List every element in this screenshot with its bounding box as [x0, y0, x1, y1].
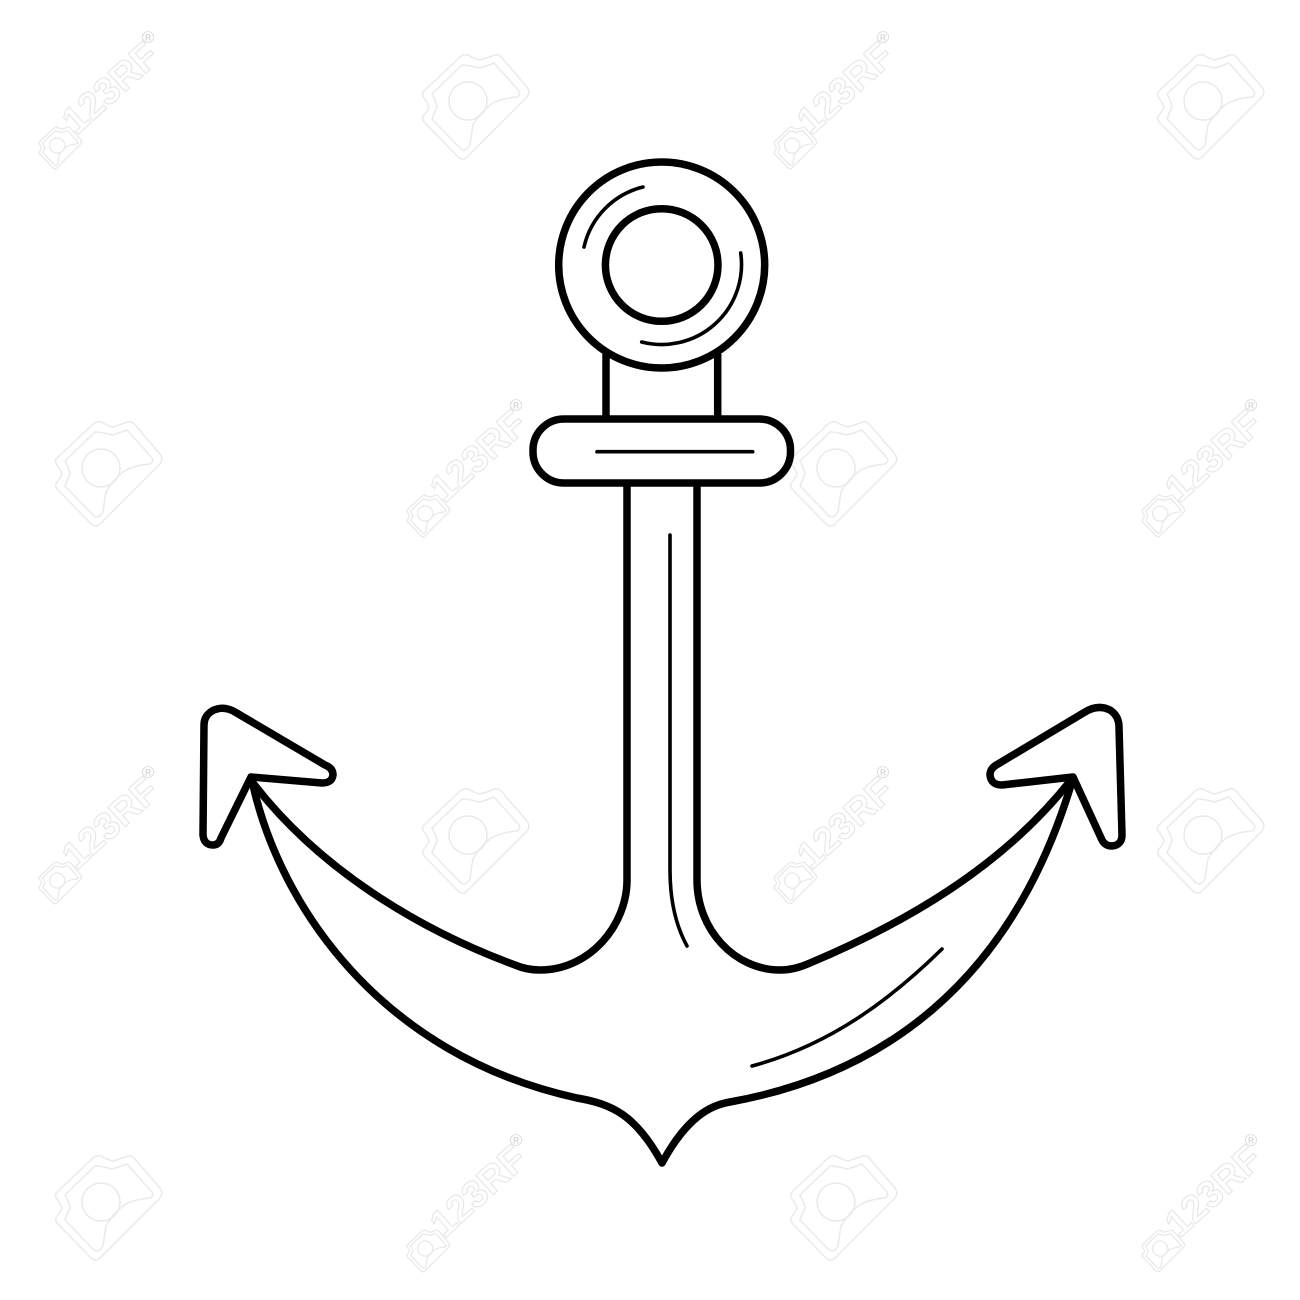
watermark stamp 8: 123RF: [1157, 1138, 1270, 1246]
watermark stamp 4: 123RF: [789, 770, 902, 878]
watermark stamp 7: ®: [510, 1131, 523, 1150]
shank highlight: [670, 535, 687, 946]
shank and flukes outline: [253, 487, 627, 970]
watermark icon 6: [790, 422, 897, 526]
watermark stamp 1: [39, 28, 167, 169]
fluke highlight: [752, 949, 942, 1066]
right barb: [990, 707, 1122, 846]
watermark stamp 5: ®: [510, 396, 523, 415]
watermark stamp 2: ®: [877, 28, 890, 47]
neck between ring and stock: [606, 354, 718, 418]
watermark icon 8: [790, 1156, 897, 1260]
watermark stamp 5: [407, 396, 535, 537]
watermark icon 5: [56, 422, 162, 526]
watermark stamp 1: 123RF: [54, 35, 167, 143]
watermark stamp 4: ®: [877, 763, 890, 782]
stock highlight: [597, 450, 753, 454]
ring outer circle: [559, 162, 765, 368]
stock bar: [533, 419, 790, 483]
lower crown curve: [253, 785, 1071, 1163]
watermark stamp 2: [774, 28, 902, 169]
watermark stamp 6: 123RF: [1157, 403, 1270, 511]
ring highlight lower right: [642, 253, 742, 344]
watermark stamp 1: ®: [142, 28, 155, 47]
watermark stamp 4: [774, 763, 902, 904]
watermark stamp 5: 123RF: [422, 403, 535, 511]
watermark icon 1: [422, 55, 529, 159]
watermark stamp 3: 123RF: [54, 770, 167, 878]
ring: [559, 162, 765, 368]
watermark icon 2: [1158, 55, 1264, 159]
anchor: [203, 162, 1122, 1163]
watermark stamp 3: ®: [142, 763, 155, 782]
ring inner circle: [605, 209, 718, 321]
watermark stamp 6: [1142, 396, 1270, 537]
ring highlight upper left: [584, 187, 643, 247]
watermark icon 4: [1158, 789, 1264, 893]
watermark icon 7: [56, 1156, 162, 1260]
watermark stamp 8: [1142, 1131, 1270, 1272]
watermark stamp 7: [407, 1131, 535, 1272]
left barb: [203, 708, 333, 845]
watermark stamp 6: ®: [1245, 396, 1258, 415]
watermark stamp 7: 123RF: [422, 1138, 535, 1246]
watermark stamp 2: 123RF: [789, 35, 902, 143]
watermark icon 3: [422, 789, 529, 893]
watermark stamp 8: ®: [1245, 1131, 1258, 1150]
watermark stamp 3: [39, 763, 167, 904]
right upper fluke curve: [697, 487, 1071, 970]
